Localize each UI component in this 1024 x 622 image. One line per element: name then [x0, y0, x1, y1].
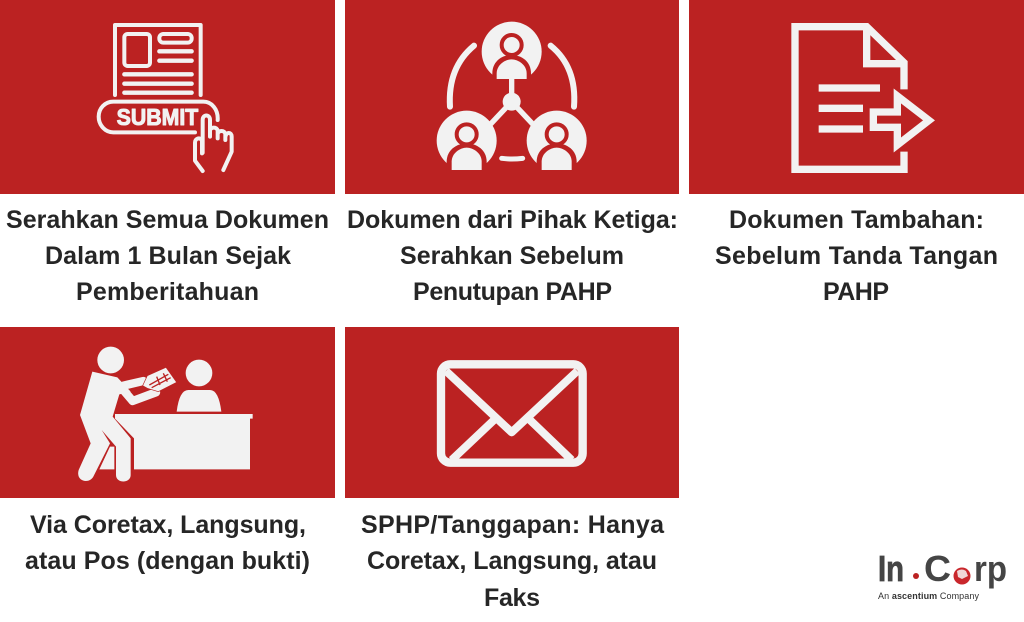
icon: three connected people [437, 22, 587, 173]
heading: submit documents: Pemberitahuan [76, 278, 259, 306]
heading: SPHP response: SPHP/Tanggapan: Hanya [361, 511, 665, 539]
heading: delivery channels: atau Pos (dengan bukti) [25, 547, 310, 575]
logo: InCorp: An ascentium Company [878, 591, 980, 601]
heading: additional documents: Sebelum Tanda Tangan [715, 242, 998, 270]
panel: third party documents [345, 0, 679, 194]
heading: SPHP response: Coretax, Langsung, atau [367, 547, 657, 575]
heading: third party documents: Dokumen dari Pihak Ketiga: [347, 206, 678, 234]
panel: submit documents [0, 0, 335, 194]
heading: additional documents: Dokumen Tambahan: [729, 206, 984, 234]
logo: InCorp: C [924, 548, 951, 589]
icon: document with arrow [795, 27, 929, 169]
heading: third party documents: Serahkan Sebelum [400, 242, 624, 270]
heading: SPHP response: Faks [484, 584, 540, 612]
panel: additional documents [689, 0, 1024, 194]
icon: submit form with hand: SUBMIT [117, 104, 198, 130]
heading: delivery channels: Via Coretax, Langsung, [30, 511, 306, 539]
heading: additional documents: PAHP [823, 278, 889, 306]
heading: submit documents [6, 206, 329, 306]
heading: third party documents [347, 206, 678, 306]
icon: submit form with hand [99, 25, 232, 171]
heading: third party documents: Penutupan PAHP [413, 278, 612, 306]
heading: additional documents [715, 206, 998, 306]
heading: delivery channels [25, 511, 310, 575]
heading: submit documents: Dalam 1 Bulan Sejak [45, 242, 291, 270]
logo: InCorp [878, 548, 1007, 601]
panel: SPHP response [345, 327, 679, 498]
logo: InCorp: In [878, 548, 904, 589]
heading: submit documents: Serahkan Semua Dokumen [6, 206, 329, 234]
icon: person at service desk [78, 347, 253, 481]
logo: InCorp: rp [974, 548, 1007, 589]
heading: SPHP response [361, 511, 665, 612]
icon: envelope [441, 364, 583, 463]
panel: delivery channels [0, 327, 335, 498]
